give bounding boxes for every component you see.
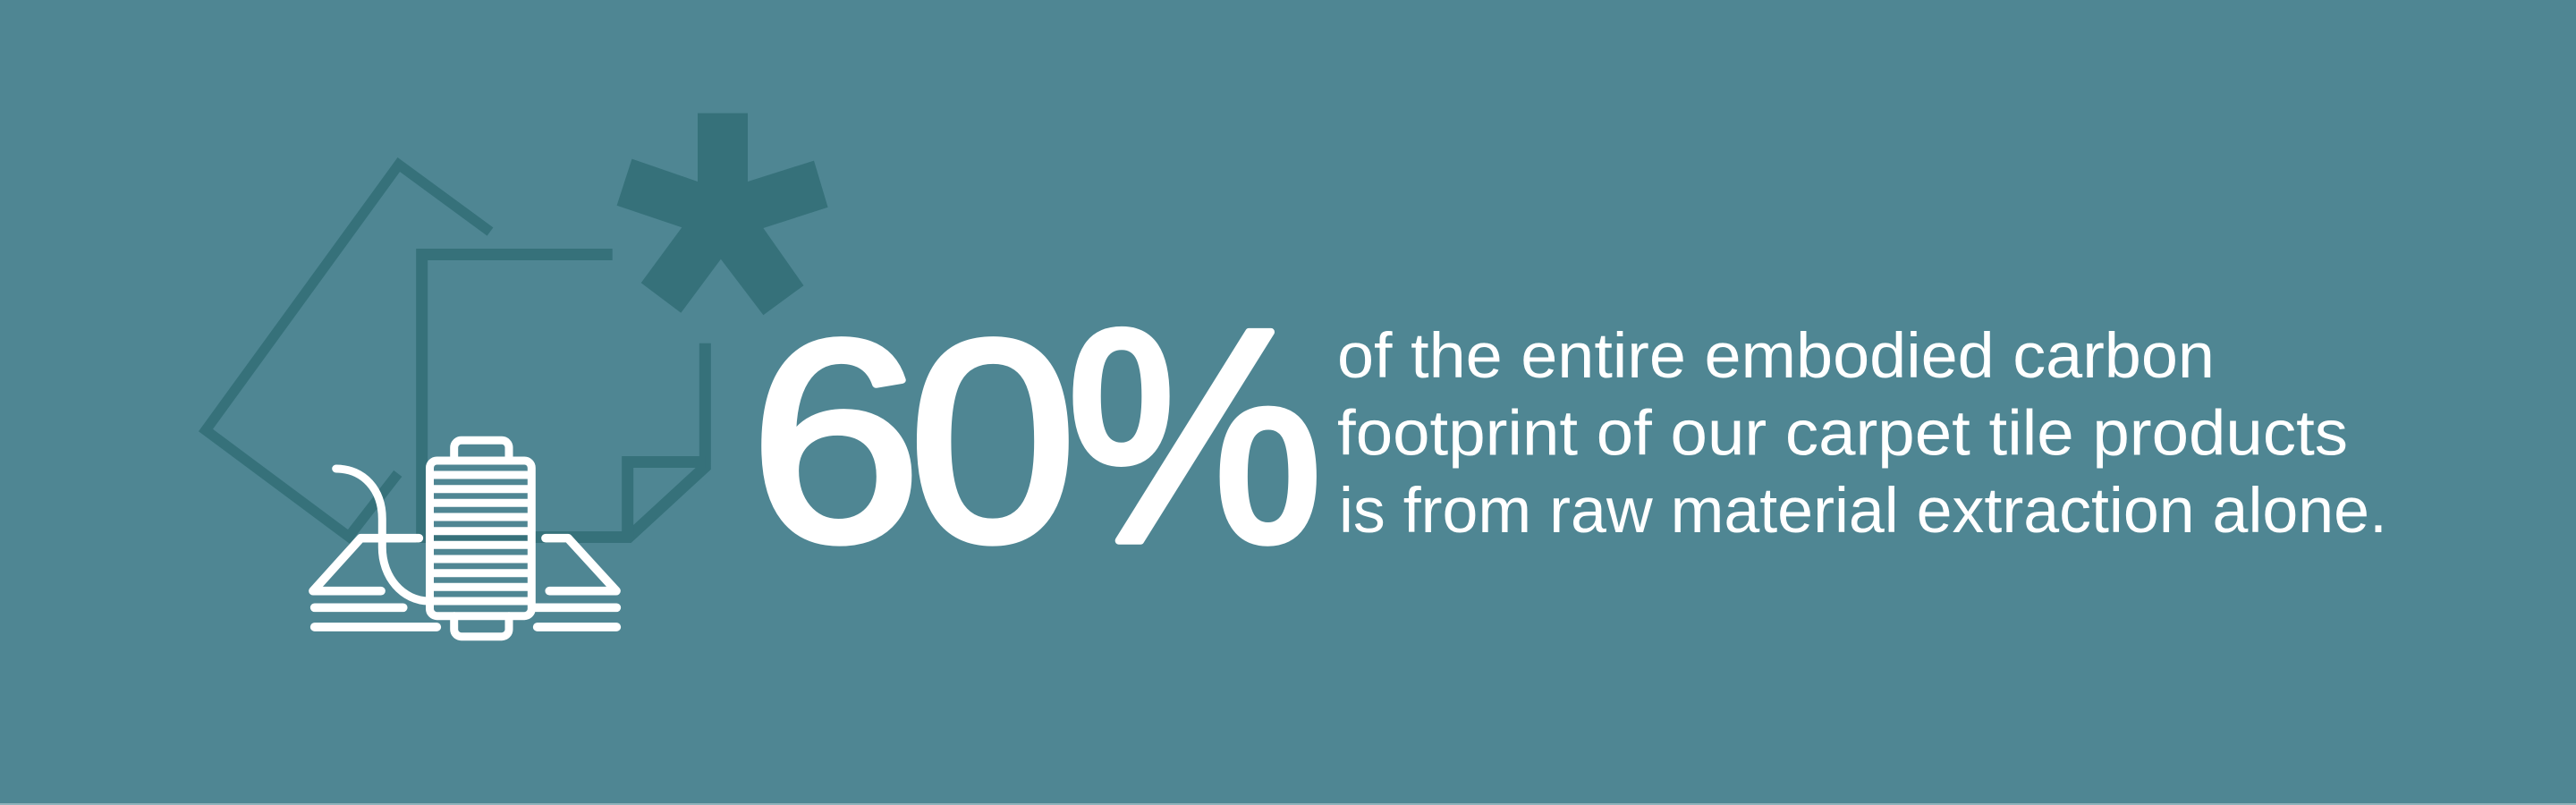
icon: thread spool and fabric — [313, 440, 616, 637]
big statistic: 60%: 6 — [750, 281, 921, 601]
description text: of the entire embodied carbon — [1337, 321, 2215, 392]
bottom edge line — [0, 803, 2576, 805]
icon: asterisk — [617, 113, 828, 315]
description text: footprint of our carpet tile products — [1337, 399, 2348, 469]
loose thread — [336, 469, 429, 601]
spool caps — [454, 440, 509, 461]
fabric right — [535, 538, 616, 627]
icon: carpet tile with folded corner — [422, 254, 705, 537]
big statistic: 60%: 0 — [909, 281, 1077, 601]
description text: is from raw material extraction alone. — [1339, 476, 2387, 547]
spool windings — [429, 475, 531, 601]
fabric left — [313, 538, 436, 627]
icon: tilted carpet tile outline — [206, 165, 490, 537]
description text — [1337, 321, 2387, 547]
big statistic: 60% — [750, 267, 1323, 606]
big statistic: 60%: % — [1066, 267, 1323, 606]
spool body — [429, 461, 531, 616]
